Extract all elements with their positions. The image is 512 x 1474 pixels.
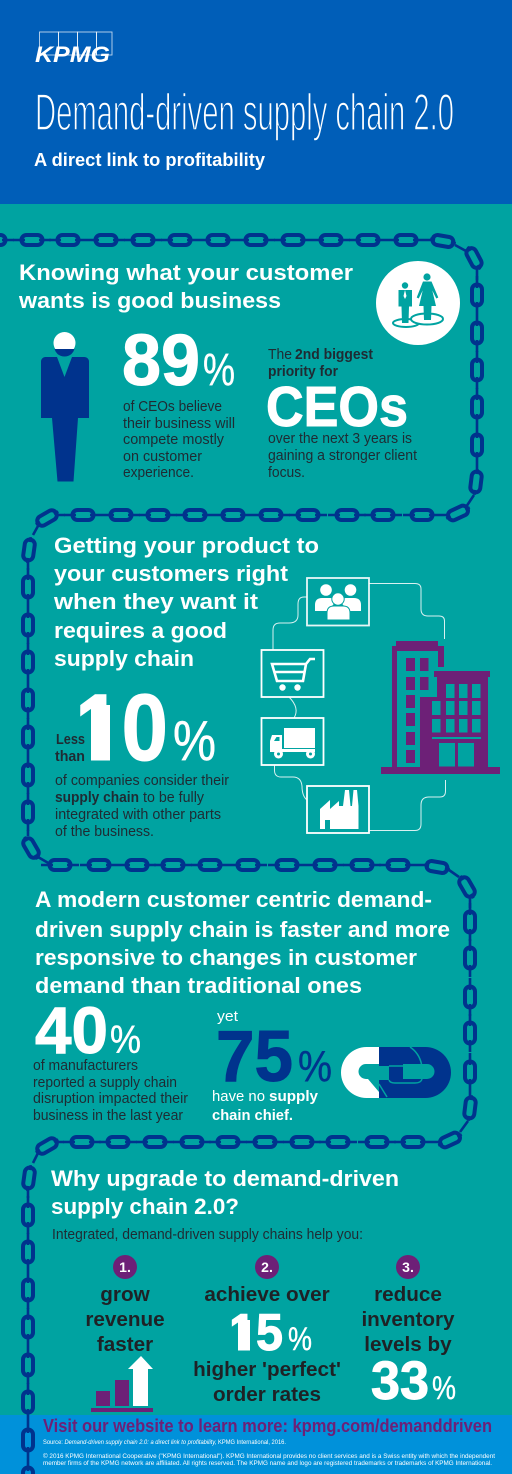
stat: CEOs priority: gaining a stronger client: [268, 447, 418, 464]
heading: Knowing what your customer: [19, 260, 353, 285]
benefit 3: reduce inventory: [361, 1255, 456, 1411]
benefit 1: grow revenue: 1.: [119, 1259, 131, 1275]
benefit 3: reduce inventory: reduce: [374, 1283, 442, 1306]
benefit 2: perfect order rates: achieve over: [204, 1283, 330, 1306]
icon box: truck: [262, 718, 324, 765]
benefit 2: perfect order rates: higher 'perfect': [193, 1358, 341, 1381]
stat: 75%: 75: [216, 1017, 293, 1097]
icon box: factory: [307, 786, 369, 833]
stat: 40%: [33, 993, 188, 1124]
stat: 89%: experience.: [123, 464, 194, 481]
intro text: Integrated, demand-driven supply chains help you:: [52, 1226, 363, 1243]
stat: 75%: [212, 1008, 332, 1124]
stat: 75%: supply: [269, 1088, 319, 1105]
stat: less than 10%: %: [173, 709, 216, 773]
stat: 75%: have no: [212, 1088, 265, 1105]
benefit 3: reduce inventory: 33: [371, 1351, 429, 1411]
benefit 3: reduce inventory: levels by: [364, 1333, 452, 1356]
heading: requires a good: [54, 618, 227, 643]
heading: [53, 533, 319, 671]
legal text: member firms of the KPMG network are affiliated. All rights reserved. The KPMG name and logo are registered trademarks or trademarks of KPMG International.: [43, 1461, 492, 1467]
icon: office buildings: [381, 641, 500, 774]
stat: less than 10%: integrated with other parts: [55, 806, 221, 823]
stat: 40%: reported a supply chain: [33, 1074, 177, 1091]
stat: 75%: %: [298, 1042, 332, 1091]
benefit 1: grow revenue: [85, 1255, 165, 1412]
heading: supply chain: [54, 646, 194, 671]
footer: [0, 1415, 512, 1474]
stat: less than 10%: [55, 675, 229, 840]
benefit 1: grow revenue: revenue: [85, 1308, 165, 1331]
stat: 89%: their business will: [123, 415, 235, 432]
panel: customer: [18, 260, 460, 482]
benefit 3: reduce inventory: 3.: [402, 1259, 414, 1275]
benefit 2: perfect order rates: order rates: [213, 1383, 321, 1406]
stat: less than 10%: of companies consider their: [55, 772, 229, 789]
stat: CEOs priority: [266, 346, 418, 481]
benefit 1: grow revenue: faster: [97, 1333, 153, 1356]
heading: A modern customer centric demand-: [35, 887, 432, 912]
stat: less than 10%: of the business.: [55, 823, 154, 840]
stat: 40%: business in the last year: [33, 1107, 183, 1124]
benefit 2: perfect order rates: [193, 1255, 341, 1406]
stat: 40%: of manufacturers: [33, 1057, 138, 1074]
stat: CEOs priority: over the next 3 years is: [268, 430, 412, 447]
benefit 3: reduce inventory: %: [432, 1370, 456, 1406]
stat: 89%: of CEOs believe: [123, 398, 222, 415]
benefit 1: grow revenue: grow: [100, 1283, 151, 1306]
heading: [18, 260, 353, 313]
heading: [51, 1166, 399, 1219]
icon: broken chain link: [341, 1047, 451, 1098]
heading: Why upgrade to demand-driven: [51, 1166, 399, 1191]
stat: CEOs priority: 2nd biggest: [295, 346, 373, 363]
benefit 2: perfect order rates: %: [288, 1321, 312, 1357]
stat: less than 10%: to be fully: [143, 789, 204, 806]
stat: 89%: 89: [122, 321, 200, 401]
stat: 89%: on customer: [123, 448, 202, 465]
benefit 2: perfect order rates: 2.: [261, 1259, 273, 1275]
icon: growth bars and arrow: [91, 1356, 153, 1412]
stat: less than 10%: Less: [56, 731, 85, 748]
stat: 89%: %: [203, 344, 235, 395]
stat: CEOs priority: CEOs: [266, 375, 408, 439]
icon: large executive figure: [41, 332, 89, 482]
connector lines: [273, 584, 446, 830]
stat: 89%: [122, 321, 235, 481]
stat: 40%: %: [110, 1019, 141, 1062]
stat: less than 10%: supply chain: [55, 789, 139, 806]
benefit 3: reduce inventory: inventory: [361, 1308, 455, 1331]
stat: CEOs priority: focus.: [268, 464, 305, 481]
heading: [35, 887, 450, 998]
legal text: [43, 1453, 495, 1467]
stat: 89%: compete mostly: [123, 431, 224, 448]
subtitle: A direct link to profitability: [34, 149, 266, 170]
stat: CEOs priority: The: [268, 346, 292, 363]
heading: driven supply chain is faster and more: [35, 917, 450, 942]
icon: customers in circle: [376, 261, 460, 345]
KPMG logo: [35, 32, 112, 67]
legal text: © 2016 KPMG International Cooperative ("KPMG International"). KPMG International provides no client services and is a Swiss entity with which the independent: [43, 1453, 495, 1460]
icon box: customers: [307, 578, 369, 626]
heading: Getting your product to: [54, 533, 319, 558]
heading: responsive to changes in customer: [35, 945, 417, 970]
stat: 75%: yet: [217, 1008, 239, 1025]
heading: when they want it: [53, 589, 259, 614]
stat: CEOs priority: priority for: [268, 363, 338, 380]
stat: 40%: 40: [35, 993, 108, 1067]
heading: wants is good business: [18, 288, 281, 313]
heading: your customers right: [54, 561, 289, 586]
KPMG logo: KPMG: [35, 42, 110, 67]
chain border: [0, 234, 485, 1474]
heading: supply chain 2.0?: [51, 1194, 239, 1219]
source: Source: Demand-driven supply chain 2.0: a direct link to profitability, KPMG International, 2016.: [43, 1440, 286, 1446]
panel: supply chain: [53, 533, 500, 840]
icon box: shopping cart: [262, 650, 324, 697]
panel: modern supply chain: [33, 887, 451, 1124]
heading: demand than traditional ones: [35, 973, 362, 998]
stat: 40%: disruption impacted their: [33, 1090, 188, 1107]
stat: less than 10%: 10: [75, 675, 168, 781]
stat: less than 10%: than: [55, 748, 85, 765]
benefit 2: perfect order rates: 15: [229, 1304, 283, 1362]
stat: 75%: chain chief.: [212, 1107, 293, 1124]
header band: [0, 0, 512, 204]
panel: why upgrade: [51, 1166, 456, 1412]
